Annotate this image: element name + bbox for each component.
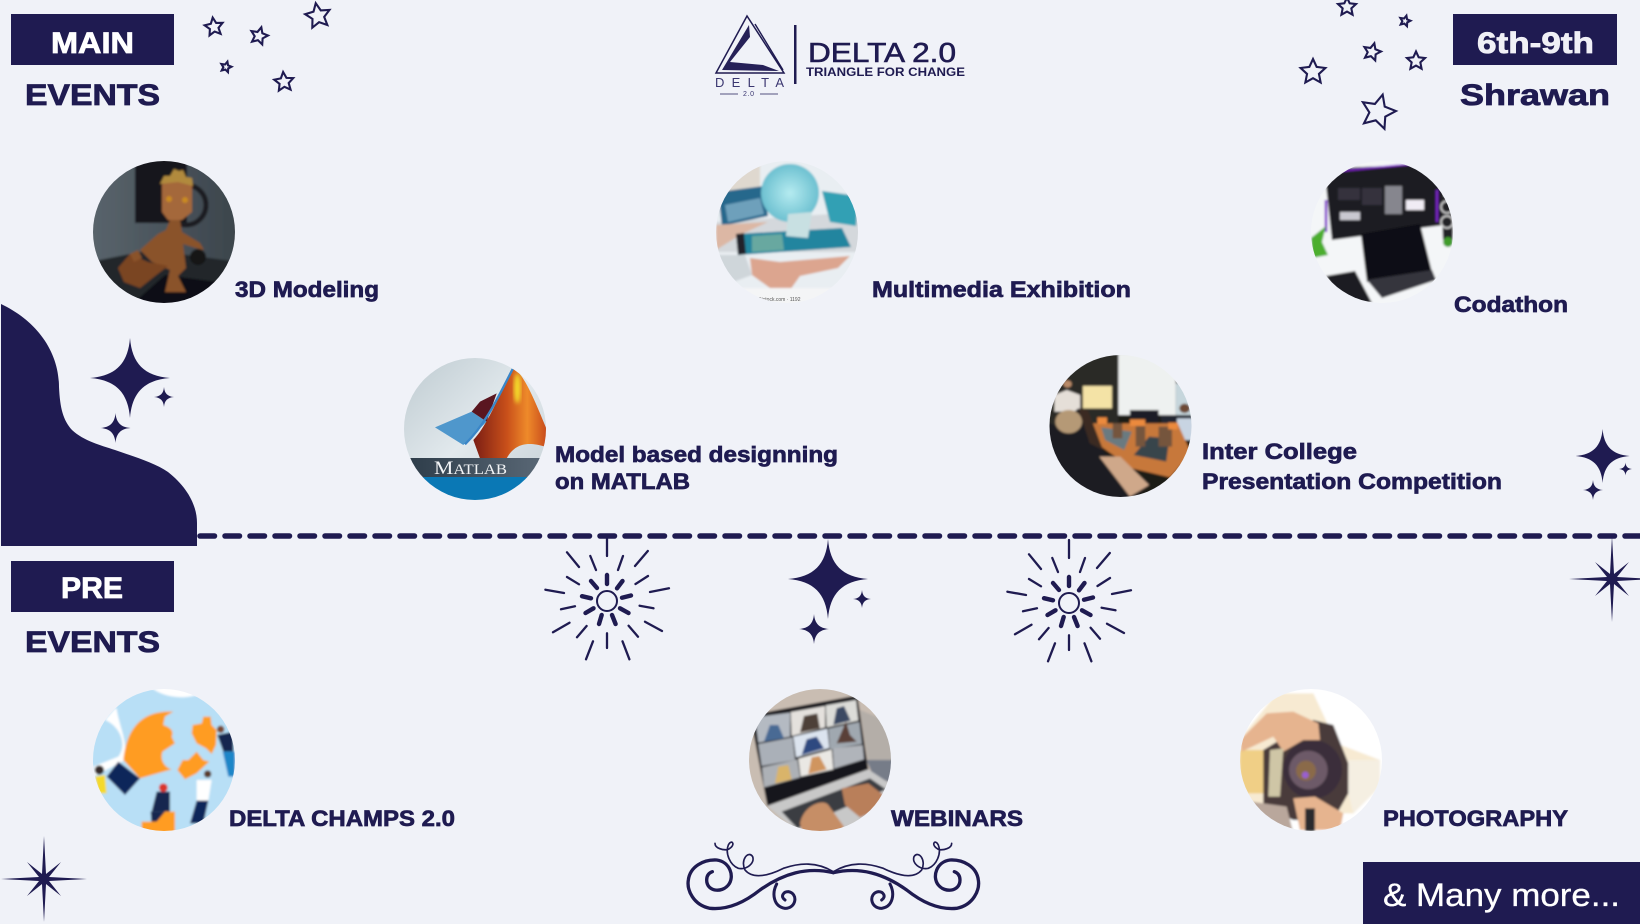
photo: Photography camera [1240, 689, 1382, 831]
heading: 6th-9th Shrawan [1453, 14, 1617, 112]
logo: Delta 2.0: DELTA [715, 75, 784, 90]
label: DELTA CHAMPS 2.0: DELTA CHAMPS 2.0 [229, 806, 455, 831]
heading: PRE EVENTS: EVENTS [25, 626, 160, 659]
heading: MAIN EVENTS: MAIN [51, 27, 134, 60]
label: Model based designning on MATLAB [555, 442, 838, 494]
label: Inter College Presentation Competition: Inter College [1202, 439, 1357, 464]
sparkles: center [788, 539, 871, 644]
logo: Delta 2.0: 2.0 [743, 91, 754, 98]
callout: & Many more [1363, 862, 1640, 924]
ornament: flourish [688, 842, 979, 909]
sparkles: right [1576, 429, 1632, 500]
heading: 6th-9th Shrawan: 6th-9th [1477, 27, 1594, 60]
timeline: dashed divider [200, 533, 1640, 539]
label: Multimedia Exhibition: Multimedia Exhibition [872, 277, 1131, 302]
photo: Codathon [1311, 163, 1453, 302]
photo: Delta Champs puzzle [90, 683, 237, 833]
burst: right [1007, 540, 1131, 661]
photo: Webinars laptop [747, 687, 893, 837]
label: PHOTOGRAPHY: PHOTOGRAPHY [1383, 806, 1568, 831]
logo: Delta 2.0: DELTA 2.0 [808, 37, 956, 68]
stars: top right [1301, 0, 1425, 130]
heading: 6th-9th Shrawan: Shrawan [1460, 79, 1610, 112]
photo: Multimedia Exhibition: ©istock.com · 1192 [758, 296, 801, 303]
stars: top left [204, 1, 332, 91]
heading: PRE EVENTS [11, 561, 174, 659]
decoration: blob shape [1, 304, 197, 546]
label: Inter College Presentation Competition: Presentation Competition [1202, 469, 1502, 494]
label: Model based designning on MATLAB: Model based designning [555, 442, 838, 467]
label: 3D Modeling: 3D Modeling [235, 277, 379, 302]
label: Model based designning on MATLAB: on MATLAB [555, 469, 690, 494]
heading: PRE EVENTS: PRE [61, 572, 123, 605]
photo: Inter College Presentation [1050, 355, 1192, 497]
burst: left [545, 538, 669, 659]
photo: MATLAB [404, 358, 546, 500]
label: WEBINARS: WEBINARS [891, 806, 1023, 831]
heading: MAIN EVENTS: EVENTS [25, 79, 160, 112]
star: eight-point left [1, 836, 87, 922]
photo: MATLAB: MATLAB [434, 458, 507, 479]
label: Inter College Presentation Competition [1202, 439, 1502, 494]
logo: Delta 2.0 [715, 16, 965, 98]
logo: Delta 2.0: TRIANGLE FOR CHANGE [806, 67, 965, 79]
sparkles: beside blob [90, 338, 174, 443]
label: Codathon: Codathon [1454, 292, 1568, 317]
heading: MAIN EVENTS [11, 14, 174, 112]
callout: & Many more: & Many more... [1383, 877, 1620, 913]
star: eight-point right [1569, 536, 1640, 622]
photo: 3D Modeling groot [93, 161, 235, 303]
photo: Multimedia Exhibition [716, 160, 860, 304]
